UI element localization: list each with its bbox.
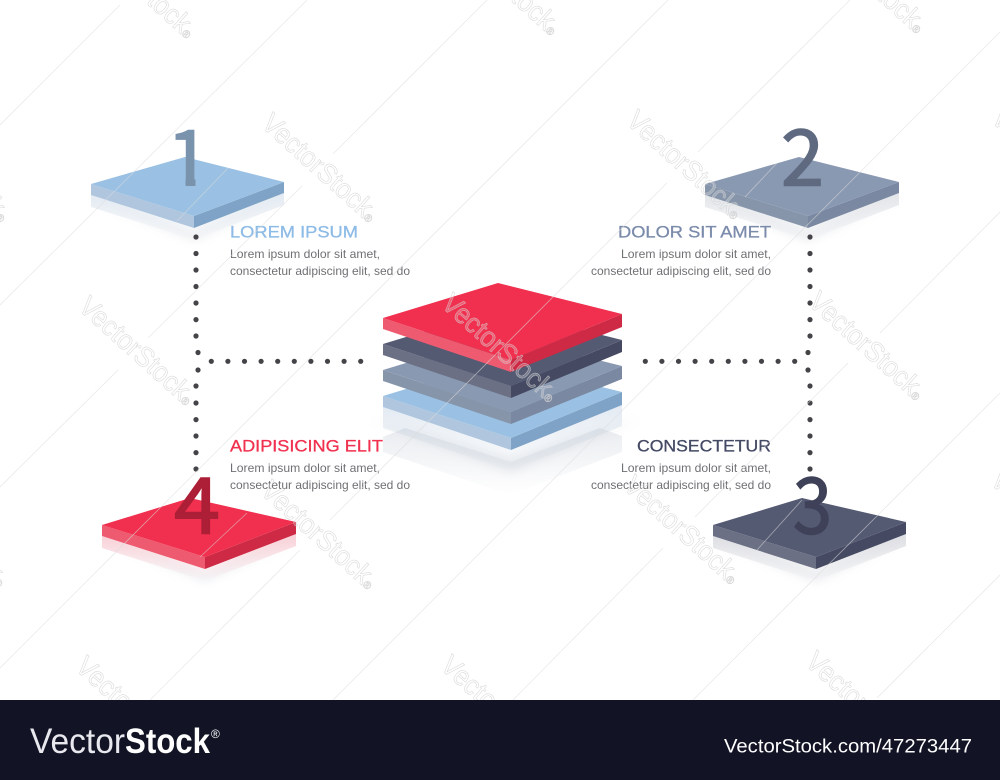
watermarks: VectorStock® bbox=[803, 285, 932, 406]
text block: dolor sit amet bbox=[591, 222, 771, 278]
watermarks: VectorStock® bbox=[800, 645, 929, 766]
layer: slate bbox=[383, 335, 622, 424]
text block: adipisicing elit: ADIPISICING ELIT bbox=[230, 436, 383, 456]
watermarks: VectorStock® bbox=[256, 107, 385, 228]
footer logo: Stock bbox=[125, 722, 210, 761]
text block: adipisicing elit: Lorem ipsum dolor sit amet, bbox=[230, 461, 380, 475]
text block: lorem ipsum: LOREM IPSUM bbox=[230, 222, 358, 242]
watermarks: VectorStock® bbox=[255, 474, 384, 595]
dotted connector: left horizontal bbox=[209, 359, 363, 364]
dotted connector: right horizontal bbox=[643, 359, 797, 364]
footer url: VectorStock.com/47273447 bbox=[724, 736, 972, 758]
layer: red bbox=[383, 283, 622, 372]
panel: tile 2 slate bbox=[698, 157, 907, 240]
footer logo: Vector bbox=[30, 722, 125, 761]
watermarks: VectorStock® bbox=[435, 649, 564, 770]
layer: dark bbox=[383, 309, 622, 398]
number 1: 1 bbox=[167, 97, 210, 209]
dotted connector: right vertical bbox=[805, 234, 813, 472]
text block: adipisicing elit: consectetur adipiscing elit, sed do bbox=[230, 478, 410, 492]
layer: blue bbox=[383, 361, 622, 450]
number 4: 4 bbox=[174, 444, 220, 556]
panel: tile 1 blue bbox=[84, 157, 292, 240]
text block: dolor sit amet: Lorem ipsum dolor sit amet, bbox=[621, 247, 771, 261]
footer bar bbox=[0, 700, 1000, 780]
text block: consectetur: Lorem ipsum dolor sit amet, bbox=[621, 461, 771, 475]
watermarks: VectorStock® bbox=[436, 287, 565, 408]
dotted connector: left vertical bbox=[193, 234, 201, 472]
text block: consectetur bbox=[591, 436, 771, 492]
footer logo: ® bbox=[211, 727, 220, 741]
text block: lorem ipsum: consectetur adipiscing elit, sed do bbox=[230, 264, 410, 278]
text block: dolor sit amet: DOLOR SIT AMET bbox=[618, 222, 771, 242]
text block: dolor sit amet: consectetur adipiscing elit, sed do bbox=[591, 264, 771, 278]
watermarks: VectorStock® bbox=[70, 650, 199, 771]
watermarks: VectorStock® bbox=[618, 469, 747, 590]
watermarks: VectorStock® bbox=[621, 104, 750, 225]
footer logo bbox=[30, 722, 220, 761]
text block: consectetur: CONSECTETUR bbox=[637, 436, 771, 456]
panel: tile 4 red bbox=[95, 498, 304, 581]
stack reflection bbox=[370, 405, 640, 495]
panel: central layered stack bbox=[370, 283, 640, 495]
panel: tile 3 dark bbox=[706, 498, 914, 581]
number 2: 2 bbox=[781, 96, 824, 208]
text block: consectetur: consectetur adipiscing elit, sed do bbox=[591, 478, 771, 492]
text block: adipisicing elit bbox=[230, 436, 410, 492]
text block: lorem ipsum bbox=[230, 222, 410, 278]
watermarks: VectorStock® bbox=[73, 290, 202, 411]
number 3: 3 bbox=[793, 444, 832, 556]
text block: lorem ipsum: Lorem ipsum dolor sit amet, bbox=[230, 247, 380, 261]
